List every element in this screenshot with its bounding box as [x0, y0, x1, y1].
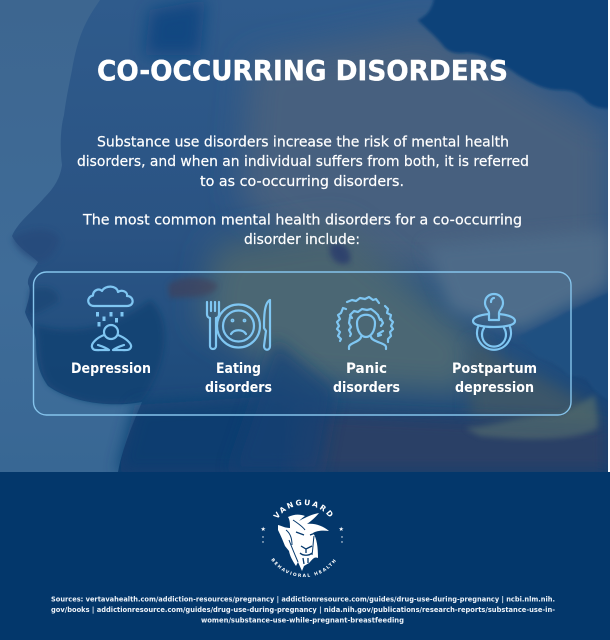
intro paragraph: [77, 134, 529, 190]
label: postpartum depression: depression: [455, 380, 534, 396]
intro paragraph: Substance use disorders increase the risk of mental health: [97, 134, 509, 150]
sources: [51, 596, 555, 624]
logo: Vanguard Behavioral Health: ★: [338, 526, 344, 533]
intro paragraph: to as co-occurring disorders.: [200, 174, 404, 190]
icon: lion head: [278, 513, 329, 571]
lead-in paragraph: [82, 212, 522, 248]
panel: disorders: [34, 272, 571, 415]
top right sky: [418, 0, 610, 109]
sources: gov/books | addictionresource.com/guides/drug-use-during-pregnancy | nida.nih.gov/publications/research-reports/substance-use-in-: [51, 606, 555, 615]
label: postpartum depression: [452, 361, 537, 396]
sources: Sources: vertavahealth.com/addiction-resources/pregnancy | addictionresource.com/guides/drug-use-during-pregnancy | ncbi.nlm.nih.: [51, 596, 555, 604]
sources: women/substance-use-while-pregnant-breastfeeding: [201, 616, 404, 624]
title: CO-OCCURRING DISORDERS: [97, 55, 508, 87]
icon: depression: [88, 287, 133, 350]
label: eating disorders: disorders: [205, 380, 272, 396]
label: postpartum depression: Postpartum: [452, 361, 537, 377]
label: panic disorders: disorders: [333, 380, 400, 396]
logo: Vanguard Behavioral Health: VANGUARD: [273, 499, 332, 518]
lead-in paragraph: disorder include:: [244, 232, 360, 248]
logo: Vanguard Behavioral Health: ★: [260, 526, 266, 533]
label: eating disorders: [205, 361, 272, 396]
lead-in paragraph: The most common mental health disorders for a co-occurring: [82, 212, 522, 228]
white right edge: [608, 0, 610, 472]
label: panic disorders: [333, 361, 400, 396]
lower right sky patch: [520, 292, 608, 397]
logo: Vanguard Behavioral Health: [260, 499, 344, 577]
icon: eating disorders: [207, 300, 270, 350]
background photo: face and clouds: [0, 0, 610, 472]
label: eating disorders: Eating: [216, 361, 261, 377]
footer band: [0, 472, 610, 640]
label: depression: Depression: [71, 361, 151, 377]
clouds: [240, 25, 608, 280]
icon: pacifier: [473, 294, 515, 350]
icon: panic disorders: [337, 297, 393, 349]
logo: Vanguard Behavioral Health: BEHAVIORAL HEALTH: [271, 558, 336, 577]
intro paragraph: disorders, and when an individual suffers from both, it is referred: [77, 154, 529, 170]
label: panic disorders: Panic: [346, 361, 387, 377]
